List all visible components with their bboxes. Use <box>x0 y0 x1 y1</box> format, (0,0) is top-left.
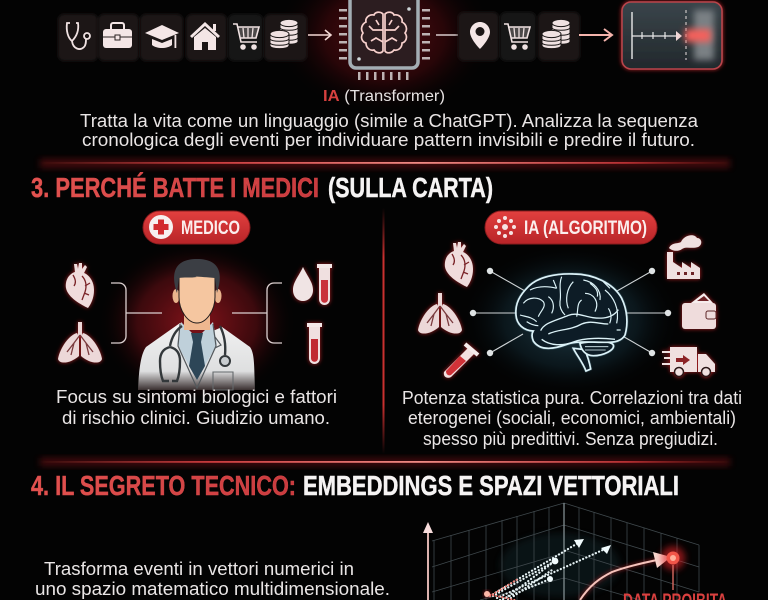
AI chip <box>339 0 430 80</box>
icon: house <box>190 22 220 50</box>
icon: factory <box>667 235 701 279</box>
prediction timeline panel <box>622 2 722 69</box>
text: ia: eterogenei (sociali, economici, ambientali) <box>408 408 736 428</box>
description text <box>80 111 699 150</box>
icon: blood drop <box>293 267 313 301</box>
icon: delivery truck <box>662 347 715 376</box>
text: ia: Potenza statistica pura. Correlazioni tra dati <box>402 388 742 408</box>
section divider <box>40 159 730 168</box>
text: embeddings: uno spazio matematico multidimensionale. <box>35 579 390 599</box>
forbidden trajectory <box>580 559 662 600</box>
icon: heart <box>66 263 94 308</box>
arrow to prediction <box>579 29 612 41</box>
network lines <box>470 268 671 356</box>
icon: test tube <box>317 264 332 305</box>
icon: cart <box>504 24 530 49</box>
icon: brain outline <box>362 12 406 53</box>
description text: Tratta la vita come un linguaggio (simile a ChatGPT). Analizza la sequenza <box>80 111 699 131</box>
text: embeddings: Trasforma eventi in vettori numerici in <box>44 559 354 579</box>
axis arrow <box>423 522 433 600</box>
icon: lungs <box>58 322 102 363</box>
panel: ia <box>402 211 742 449</box>
text: medico <box>56 387 337 428</box>
text: ia: spesso più predittivi. Senza pregiudizi. <box>423 429 718 449</box>
badge: medico: MEDICO <box>181 218 240 239</box>
heading: section 3: 3. PERCHÉ BATTE I MEDICI <box>31 172 319 203</box>
origin cluster <box>487 579 518 600</box>
icon: test tube diagonal <box>444 344 478 378</box>
icon: stethoscope <box>67 23 90 49</box>
icon: heart <box>445 242 473 287</box>
illustration: brain <box>516 274 627 371</box>
heading: section 4: 4. IL SEGRETO TECNICO: <box>31 470 296 501</box>
heading: section 3: (SULLA CARTA) <box>328 172 493 203</box>
connector brackets <box>111 283 282 343</box>
grid <box>432 503 699 600</box>
chip glow <box>274 0 494 117</box>
vertical divider <box>382 208 384 454</box>
icon: coins <box>542 19 570 49</box>
icon: lungs <box>418 293 462 334</box>
text: medico: di rischio clinici. Giudizio umano. <box>62 408 330 428</box>
arrow to chip <box>308 30 331 40</box>
icon: cart <box>233 24 259 49</box>
icon: briefcase <box>103 23 132 48</box>
icon: location pin <box>470 22 490 49</box>
text: medico: Focus su sintomi biologici e fattori <box>56 387 337 407</box>
input events row <box>58 14 307 61</box>
text: ia <box>402 388 742 449</box>
red point <box>661 546 685 570</box>
vector trajectories <box>490 543 605 600</box>
heading: section 4 <box>31 470 679 501</box>
section divider <box>40 458 730 466</box>
icon: test tube lower <box>307 323 322 364</box>
icon: graduation cap <box>145 25 179 48</box>
panel: medico <box>56 211 337 428</box>
illustration: doctor <box>138 259 255 390</box>
badge: ia algoritmo <box>485 211 657 244</box>
chart: vector space <box>423 503 727 600</box>
text: embeddings <box>35 559 390 599</box>
heading: section 4: EMBEDDINGS E SPAZI VETTORIALI <box>303 470 679 501</box>
badge: ia algoritmo: IA (ALGORITMO) <box>524 218 647 239</box>
icon: wallet <box>682 293 716 329</box>
connector line <box>436 34 458 36</box>
icon: coins <box>270 19 298 49</box>
chip caption: IA (Transformer) <box>323 88 445 105</box>
badge: medico <box>143 211 250 244</box>
output events row <box>458 12 580 61</box>
description text: cronologica degli eventi per individuare pattern invisibili e predire il futuro. <box>82 130 695 150</box>
